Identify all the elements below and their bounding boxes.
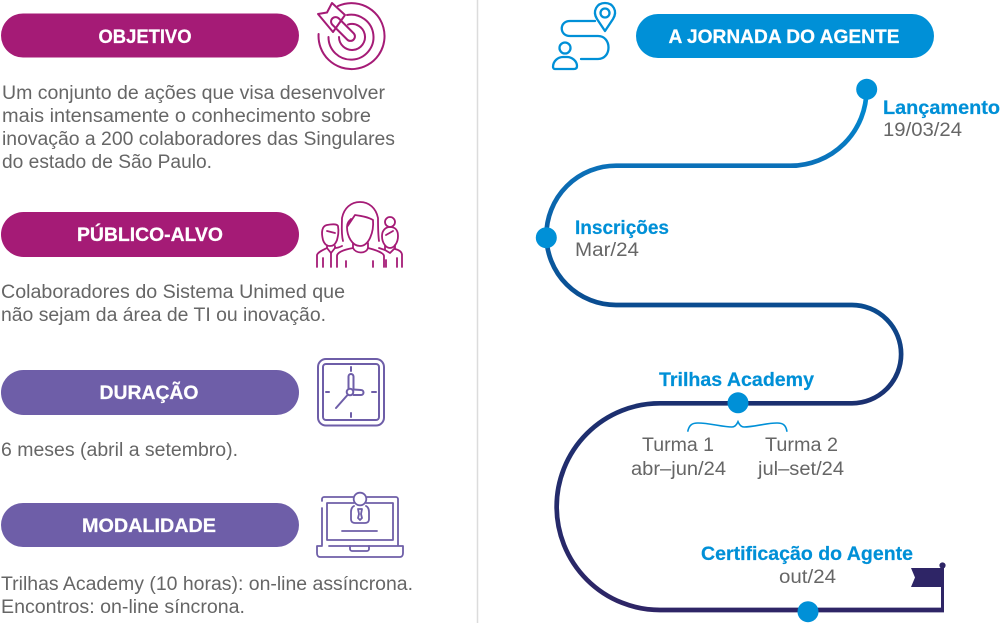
column divider (476, 0, 478, 623)
heading: objetivo: OBJETIVO (98, 26, 192, 48)
heading: a jornada do agente (636, 14, 934, 58)
turma 1: abr–jun/24 (631, 459, 726, 480)
milestone: lançamento: Lançamento (883, 98, 1000, 119)
panel: duração (1, 359, 384, 461)
text: público-alvo description: não sejam da área de TI ou inovação. (1, 305, 326, 326)
milestone: certificação do agente: out/24 (779, 567, 836, 588)
journey path (546, 90, 944, 612)
milestone: lançamento (856, 79, 1000, 141)
turma 1: Turma 1 (642, 435, 714, 456)
turma 2: jul–set/24 (757, 459, 844, 480)
text: objetivo description: do estado de São Paulo. (2, 152, 212, 173)
heading: modalidade (1, 503, 299, 547)
milestone: inscrições: Inscrições (575, 218, 669, 239)
milestone: inscrições: Mar/24 (575, 240, 639, 261)
icon: square clock (318, 359, 384, 426)
text: modalidade description: Trilhas Academy (10 horas): on-line assíncrona. (1, 574, 413, 595)
panel: objetivo (1, 3, 395, 173)
turma 2 (757, 435, 844, 480)
text: modalidade description: Encontros: on-line síncrona. (1, 597, 245, 618)
heading: objetivo (1, 14, 299, 58)
milestone: trilhas academy (631, 370, 844, 480)
heading: público-alvo (1, 212, 299, 257)
heading: público-alvo: PÚBLICO-ALVO (77, 222, 223, 246)
panel: a jornada do agente (536, 3, 1000, 622)
heading: duração (1, 370, 299, 415)
milestone: lançamento: 19/03/24 (883, 120, 962, 141)
milestone: trilhas academy: Trilhas Academy (659, 370, 814, 391)
text: público-alvo description (1, 282, 345, 326)
brace (688, 422, 787, 432)
icon: group of people (317, 202, 402, 267)
text: público-alvo description: Colaboradores do Sistema Unimed que (1, 282, 345, 303)
text: modalidade description (1, 574, 413, 618)
turma 1 (631, 435, 726, 480)
milestone: inscrições (536, 218, 669, 261)
text: objetivo description: Um conjunto de ações que visa desenvolver (2, 83, 386, 104)
panel: modalidade (1, 493, 413, 618)
text: duração description: 6 meses (abril a setembro). (1, 440, 238, 461)
icon: target with arrow (318, 3, 385, 69)
icon: laptop with presenter (317, 493, 403, 557)
turma 2: Turma 2 (765, 435, 838, 456)
icon: route with pin and person (553, 3, 615, 69)
milestone: certificação do agente (701, 544, 913, 622)
icon: finish flag (911, 562, 946, 587)
text: objetivo description: mais intensamente o conhecimento sobre (2, 106, 371, 127)
milestone: certificação do agente: Certificação do Agente (701, 544, 913, 565)
panel: público-alvo (1, 202, 402, 326)
heading: duração: DURAÇÃO (100, 381, 198, 404)
text: objetivo description (2, 83, 395, 173)
heading: modalidade: MODALIDADE (82, 515, 216, 537)
text: objetivo description: inovação a 200 colaboradores das Singulares (2, 129, 395, 150)
heading: a jornada do agente: A JORNADA DO AGENTE (668, 26, 900, 48)
